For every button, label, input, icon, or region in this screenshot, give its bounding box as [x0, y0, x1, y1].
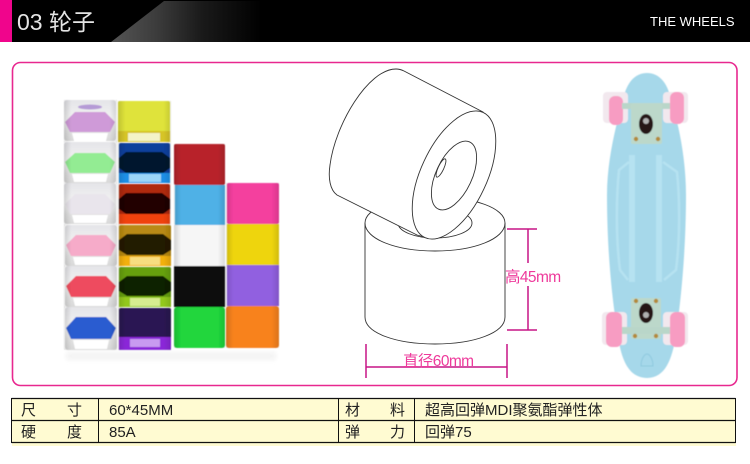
row 1 labels and values: 寸: [67, 402, 82, 419]
spec table: [12, 398, 736, 446]
height dimension arrow: [507, 229, 537, 330]
header bar: [0, 0, 750, 42]
column 1: clear wheels: [64, 100, 117, 350]
top truck wheels: [603, 92, 688, 125]
row 1 labels and values: 60*45MM: [109, 402, 173, 419]
row 2 labels and values: [21, 424, 472, 441]
row 1 labels and values: 超高回弹MDI聚氨酯弹性体: [425, 402, 602, 419]
column 2: translucent wheels: [118, 101, 171, 350]
panel border: [12, 62, 737, 386]
header english label: THE WHEELS: [650, 14, 735, 29]
lower wheel outline: [365, 197, 505, 344]
row 2 labels and values: 弹: [345, 424, 360, 441]
top truck: [622, 103, 670, 144]
row 1 labels and values: 尺: [21, 402, 36, 419]
header title: 03 轮子: [17, 9, 95, 35]
row 2 labels and values: 硬: [21, 424, 36, 441]
header pink tab: [0, 0, 12, 42]
line drawing: wheel dimensions: [329, 69, 561, 378]
deck: [607, 73, 686, 378]
photo: skateboard: [602, 73, 688, 378]
header sheen: [111, 1, 262, 42]
row 1 labels and values: [21, 402, 602, 419]
photo: coloured wheel stacks: [64, 100, 279, 360]
deck ribs: [632, 155, 659, 282]
row 2 labels and values: 85A: [109, 424, 136, 441]
row 2 labels and values: 回弹75: [425, 424, 472, 441]
height label: 高45mm: [505, 268, 561, 286]
upper wheel outline: [329, 69, 513, 251]
bottom truck: [622, 298, 670, 339]
row 2 labels and values: 力: [390, 424, 405, 441]
floor reflection: [66, 352, 276, 360]
row 1 labels and values: 材: [345, 402, 360, 419]
column 3: solid wheels: [174, 144, 225, 348]
row 2 labels and values: 度: [67, 424, 82, 441]
bottom truck wheels: [602, 312, 688, 347]
column 4: solid wheels: [226, 183, 279, 348]
diameter label: 直径60mm: [403, 352, 473, 370]
row 1 labels and values: 料: [390, 402, 405, 419]
diameter dimension arrow: [366, 344, 507, 378]
